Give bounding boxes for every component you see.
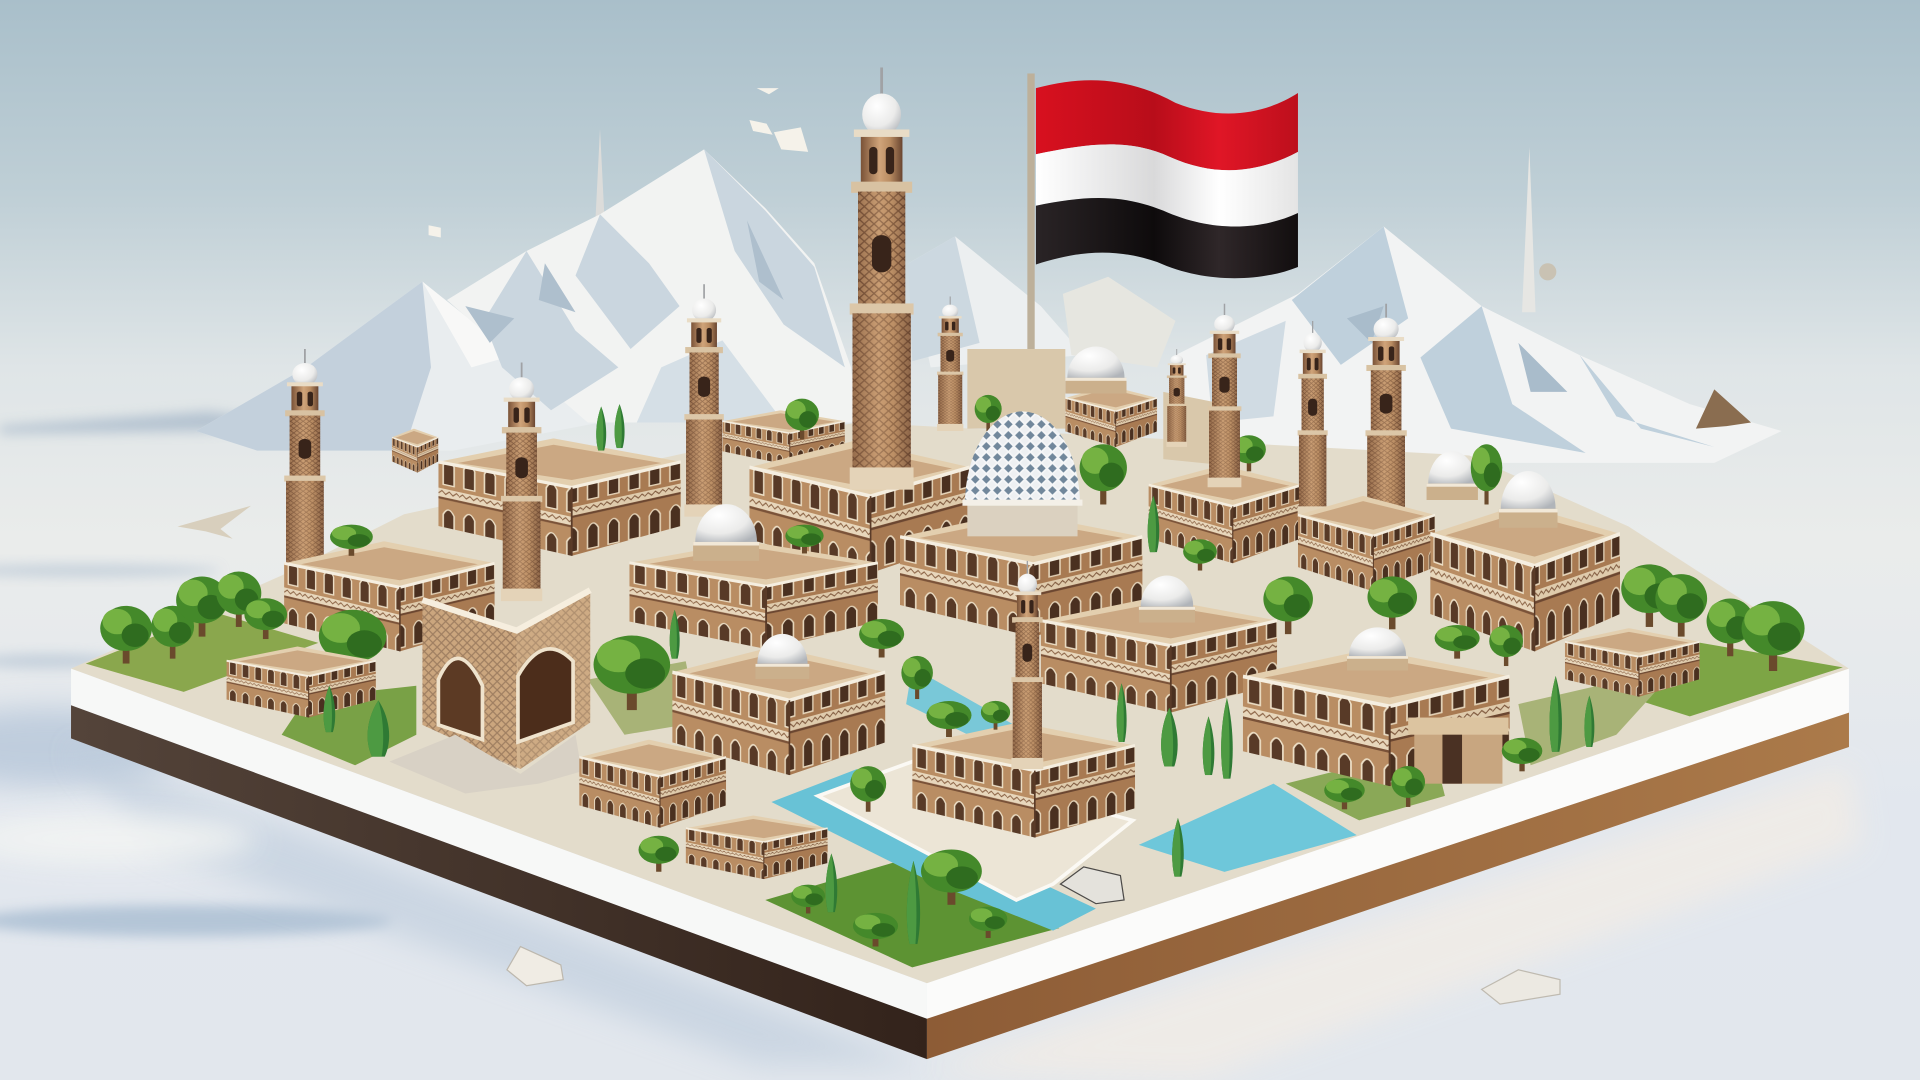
building: right complex bbox=[1243, 649, 1510, 786]
flag and pole bbox=[1027, 73, 1298, 429]
right side white band bbox=[927, 669, 1849, 1019]
foreground trees bbox=[324, 656, 1594, 947]
small plane left bbox=[178, 506, 251, 539]
flag pole bbox=[1027, 73, 1035, 429]
trees behind front row bbox=[100, 404, 1805, 710]
minaret: centre left bbox=[684, 284, 724, 517]
building: small right pavilion bbox=[1565, 628, 1700, 697]
building: right tall block bbox=[1298, 496, 1435, 591]
building: right small dome bbox=[1427, 451, 1478, 500]
minaret: right two bbox=[1298, 321, 1328, 517]
flag white band bbox=[1036, 144, 1298, 227]
building: rear dome hall bbox=[1065, 386, 1157, 447]
building: small left pavilion bbox=[227, 647, 376, 718]
water canals bbox=[771, 667, 1357, 931]
platform ground bbox=[71, 422, 1849, 983]
building: centre left hall with dome bbox=[629, 541, 878, 649]
building: central mosque base bbox=[900, 512, 1142, 637]
distant white spires bbox=[595, 129, 1556, 312]
rear shrubs bbox=[785, 399, 819, 440]
front row buildings bbox=[227, 561, 1700, 879]
front mosque with minaret bbox=[912, 561, 1135, 838]
building: rear tan blocks bbox=[967, 349, 1224, 465]
building: centre right hall with dome bbox=[1041, 598, 1277, 713]
small plane right bbox=[1696, 389, 1751, 429]
building: far left hall bbox=[284, 541, 495, 651]
back city buildings bbox=[392, 296, 1478, 563]
boat left bbox=[507, 947, 563, 986]
middle row buildings bbox=[284, 411, 1620, 713]
soft cast shadows on the floor bbox=[0, 411, 1861, 1080]
building: low front block bbox=[686, 816, 828, 879]
car bbox=[1060, 867, 1124, 904]
birds and clouds bbox=[429, 88, 808, 238]
building: right hall with dome bbox=[1430, 504, 1620, 651]
building: square domed hall bbox=[672, 647, 885, 775]
central lattice dome bbox=[965, 411, 1080, 504]
triumphal arch gate bbox=[422, 590, 590, 769]
boat right bbox=[1482, 970, 1560, 1004]
mountain range bbox=[196, 149, 1782, 463]
minarets bbox=[284, 284, 1407, 601]
building: small left outpost bbox=[392, 429, 438, 473]
flag black band bbox=[1036, 198, 1298, 278]
left side brown band bbox=[71, 705, 927, 1059]
building: rear right block bbox=[1149, 465, 1302, 563]
building: small front block bbox=[579, 740, 726, 828]
mosque plaza bbox=[818, 762, 1133, 900]
minaret: left bbox=[501, 362, 542, 601]
building: rear towers bbox=[937, 296, 963, 431]
left side white band bbox=[71, 669, 927, 1019]
garden beds bbox=[86, 612, 1843, 967]
tall central tower and base bbox=[749, 67, 970, 573]
platform bbox=[71, 422, 1849, 1059]
minaret: right three bbox=[1365, 304, 1407, 530]
right side brown band bbox=[927, 713, 1849, 1059]
vehicles and small details bbox=[178, 88, 1751, 1004]
building: long left block bbox=[438, 438, 681, 556]
building: rear left mid block bbox=[722, 410, 845, 465]
minaret: right one bbox=[1208, 304, 1241, 487]
stairs bbox=[389, 735, 582, 793]
minaret: far left bbox=[284, 349, 326, 576]
flag red band bbox=[1036, 80, 1298, 170]
